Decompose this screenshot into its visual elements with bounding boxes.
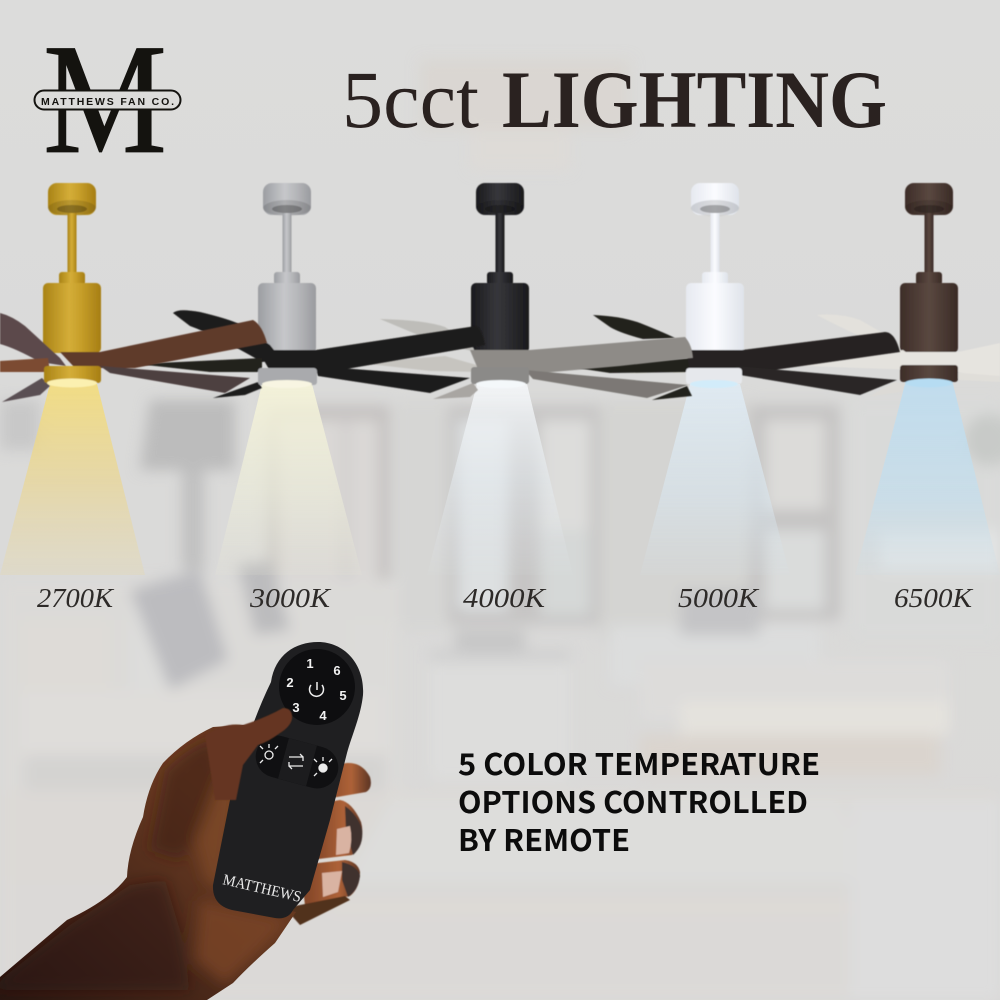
palm and wrist xyxy=(0,720,300,1000)
label: 5000K: 5000K xyxy=(678,583,760,613)
power icon xyxy=(310,682,324,696)
light beam: 3000K xyxy=(215,384,362,575)
caption: OPTIONS CONTROLLED xyxy=(458,778,808,822)
caption: BY REMOTE xyxy=(458,816,630,860)
caption xyxy=(458,740,820,860)
caption: 5 COLOR TEMPERATURE xyxy=(458,740,820,784)
fingers xyxy=(285,763,371,925)
logo: Matthews Fan Co.: M xyxy=(43,12,167,187)
fan: black with gray wood blades xyxy=(360,183,693,399)
dial xyxy=(279,649,355,725)
buttons xyxy=(251,731,343,793)
label: 2700K: 2700K xyxy=(37,583,115,613)
dial numbers: 5 xyxy=(339,688,347,703)
light beam: 5000K xyxy=(640,384,790,575)
fan: white with black blades xyxy=(570,183,900,400)
logo: Matthews Fan Co.: MATTHEWS FAN CO. xyxy=(41,96,174,108)
dial numbers xyxy=(286,656,347,723)
dial numbers: 3 xyxy=(292,700,300,715)
fan: bronze with white blades xyxy=(780,183,1000,397)
remote brand: MATTHEWS xyxy=(221,871,303,906)
title: 5cct xyxy=(342,54,479,145)
thumb xyxy=(205,708,292,800)
dial numbers: 6 xyxy=(333,663,341,678)
fan: brass with walnut blades xyxy=(0,183,267,402)
light beam: 4000K xyxy=(427,384,573,575)
fan: silver with black blades xyxy=(137,183,485,398)
light beam: 2700K xyxy=(0,384,145,575)
dial numbers: 1 xyxy=(306,656,314,671)
dial numbers: 2 xyxy=(286,675,294,690)
label: 4000K: 4000K xyxy=(463,583,547,613)
title: LIGHTING xyxy=(502,54,887,145)
label: 3000K: 3000K xyxy=(249,583,332,613)
remote body xyxy=(213,642,363,918)
label: 6500K: 6500K xyxy=(894,583,974,613)
button icons xyxy=(260,744,332,776)
dial numbers: 4 xyxy=(319,708,327,723)
palm shading xyxy=(0,738,290,990)
title xyxy=(342,54,887,145)
light beam: 6500K xyxy=(855,384,1000,575)
hand holding remote xyxy=(0,642,371,1000)
